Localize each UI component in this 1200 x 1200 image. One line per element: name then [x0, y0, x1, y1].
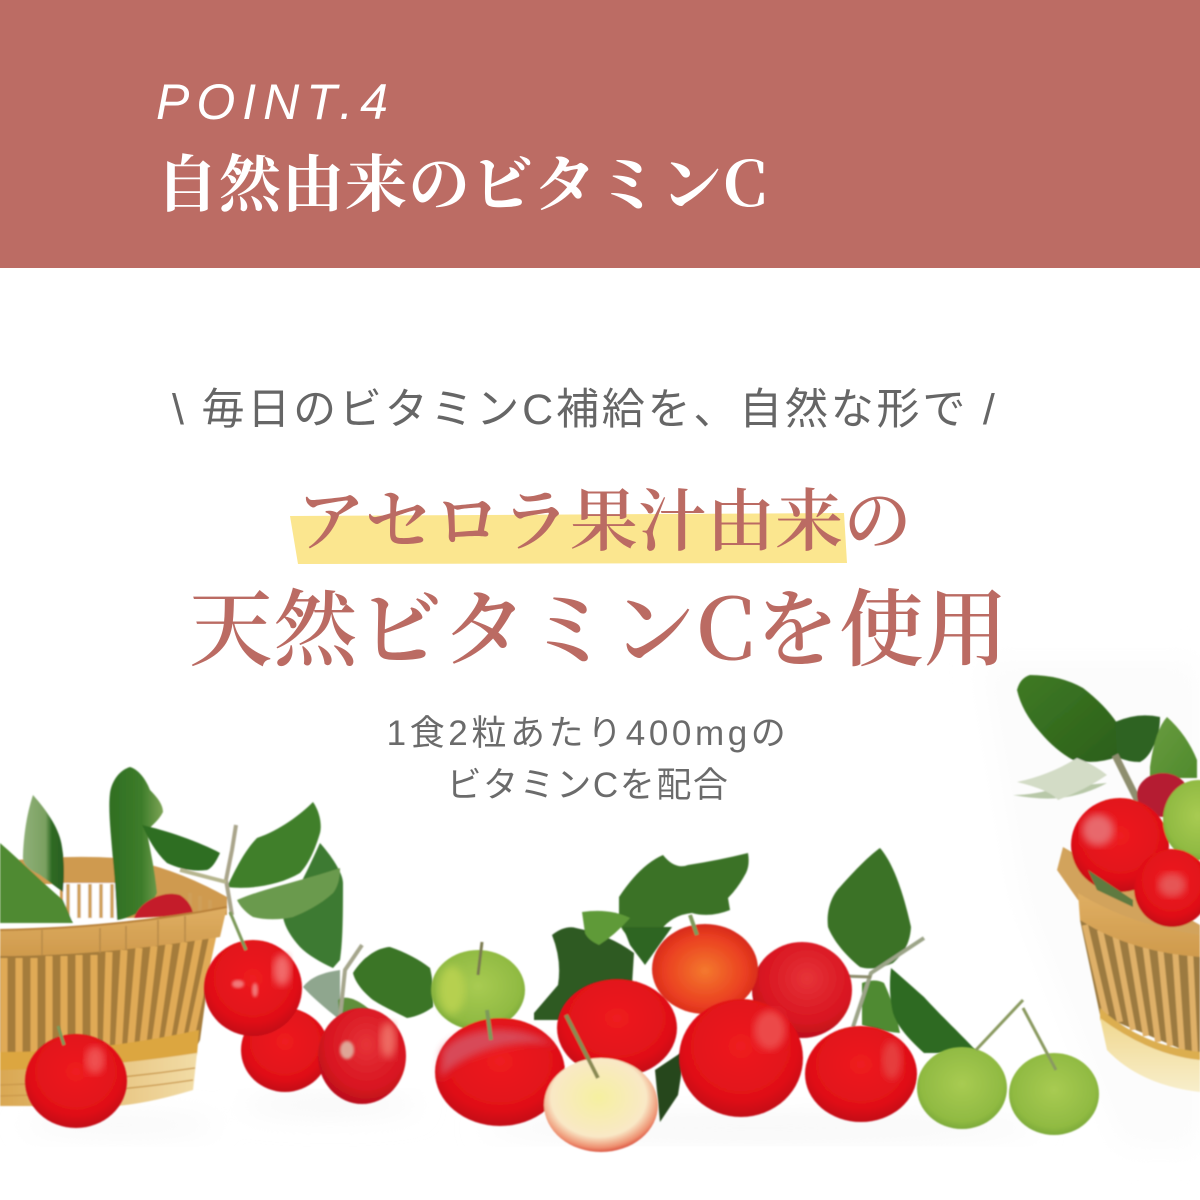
- centre leaves: [534, 848, 978, 1122]
- right basket group: [1013, 675, 1200, 1092]
- back rim: [0, 857, 227, 920]
- red apples: [752, 942, 852, 1038]
- basket apples: [1137, 773, 1189, 817]
- rim: [1078, 893, 1200, 957]
- leaf: back left: [23, 795, 64, 892]
- leaves: lower right: [303, 970, 340, 1020]
- header title: 自然由来のビタミンC: [156, 135, 768, 224]
- front rim: [0, 907, 227, 956]
- red apple inside basket: [134, 894, 193, 918]
- right leaves: [1017, 675, 1117, 762]
- subheading: \ 毎日のビタミンC補給を、自然な形で /: [172, 386, 998, 434]
- left loose apples: [25, 912, 406, 1128]
- supporting text: ビタミンCを配合: [446, 766, 730, 805]
- ground shadows: [20, 1097, 1040, 1138]
- left basket and leaves: [0, 767, 433, 1106]
- leaf: large left: [0, 843, 73, 923]
- highlight marker: [290, 513, 847, 564]
- apple: [241, 1008, 329, 1092]
- green apple: [431, 950, 525, 1030]
- point label: POINT.4: [156, 74, 395, 130]
- header band: [0, 0, 1200, 268]
- base: [1100, 1018, 1200, 1092]
- supporting text: 1食2粒あたり400mgの: [387, 714, 789, 753]
- lace band: [1100, 1008, 1200, 1062]
- cut apple: [544, 1058, 658, 1152]
- leaves: branch: [142, 825, 220, 871]
- centre apples: [431, 915, 1099, 1152]
- body ribs: [0, 930, 215, 1075]
- back rim: [1057, 847, 1200, 955]
- lace band: [0, 1030, 199, 1072]
- leaf: tall: [109, 767, 163, 920]
- headline line 2: 天然ビタミンCを使用: [189, 563, 1009, 684]
- small leaf: [1088, 870, 1133, 907]
- green apples: [917, 1047, 1007, 1129]
- dark gaps behind fruit: [655, 1050, 685, 1122]
- supporting text: [387, 714, 789, 805]
- headline line 1: アセロラ果汁由来の: [297, 468, 912, 565]
- ribs: [1080, 920, 1200, 1057]
- base: [0, 1053, 197, 1106]
